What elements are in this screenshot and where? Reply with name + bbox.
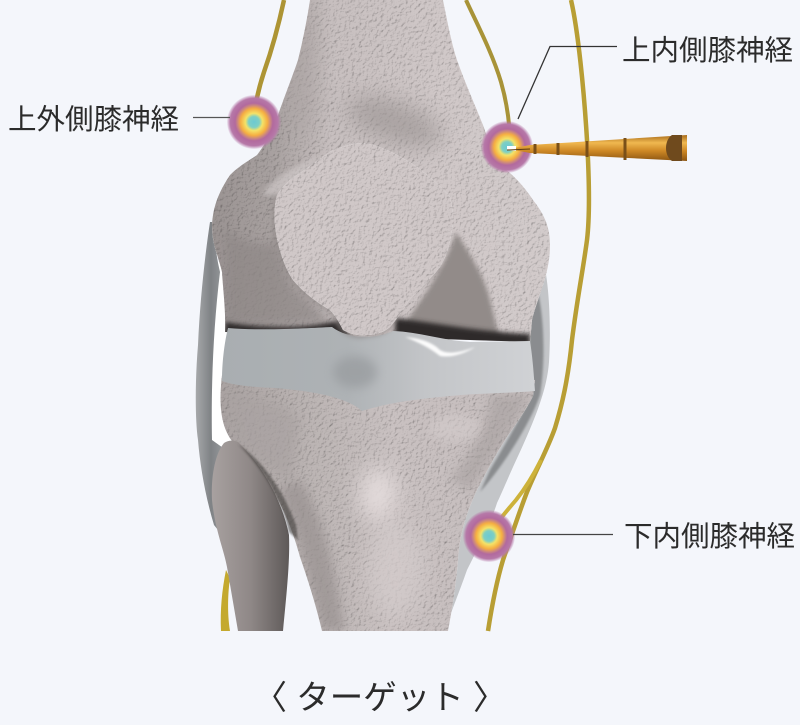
label: lower medial nerve: 下内側膝神経 xyxy=(624,521,795,553)
nerve: lower lateral xyxy=(221,570,230,631)
femur shading xyxy=(225,0,530,345)
lower medial target xyxy=(463,510,515,562)
nerve: long medial xyxy=(488,0,589,631)
white gap behind joint xyxy=(208,262,232,460)
needle xyxy=(507,135,687,161)
nerve: upper medial xyxy=(466,0,510,145)
femur xyxy=(212,0,550,345)
upper medial target xyxy=(481,121,533,173)
patella shadow xyxy=(275,195,440,336)
nerve: lower medial branch xyxy=(498,460,541,522)
label: upper medial nerve: 上内側膝神経 xyxy=(622,35,793,67)
leader line: upper lateral xyxy=(193,116,230,118)
leader line: lower medial xyxy=(513,534,613,536)
patella xyxy=(274,143,453,335)
nerve: upper lateral xyxy=(253,0,284,122)
label: upper lateral nerve: 上外側膝神経 xyxy=(8,104,179,136)
ligament: medial xyxy=(440,250,550,631)
meniscus shadow xyxy=(333,356,377,388)
meniscus highlight xyxy=(405,337,475,357)
upper lateral target xyxy=(227,95,281,149)
tibia xyxy=(221,375,535,631)
tibia edge over fibula xyxy=(238,444,298,540)
tibia shading xyxy=(224,395,530,631)
ligament: lateral xyxy=(196,222,226,540)
leader line: upper medial xyxy=(518,46,617,119)
ligament: medial inner shadow xyxy=(480,285,543,492)
caption: target: 〈 ターゲット 〉 xyxy=(253,680,507,717)
fibula xyxy=(212,441,289,631)
meniscus xyxy=(222,327,535,411)
